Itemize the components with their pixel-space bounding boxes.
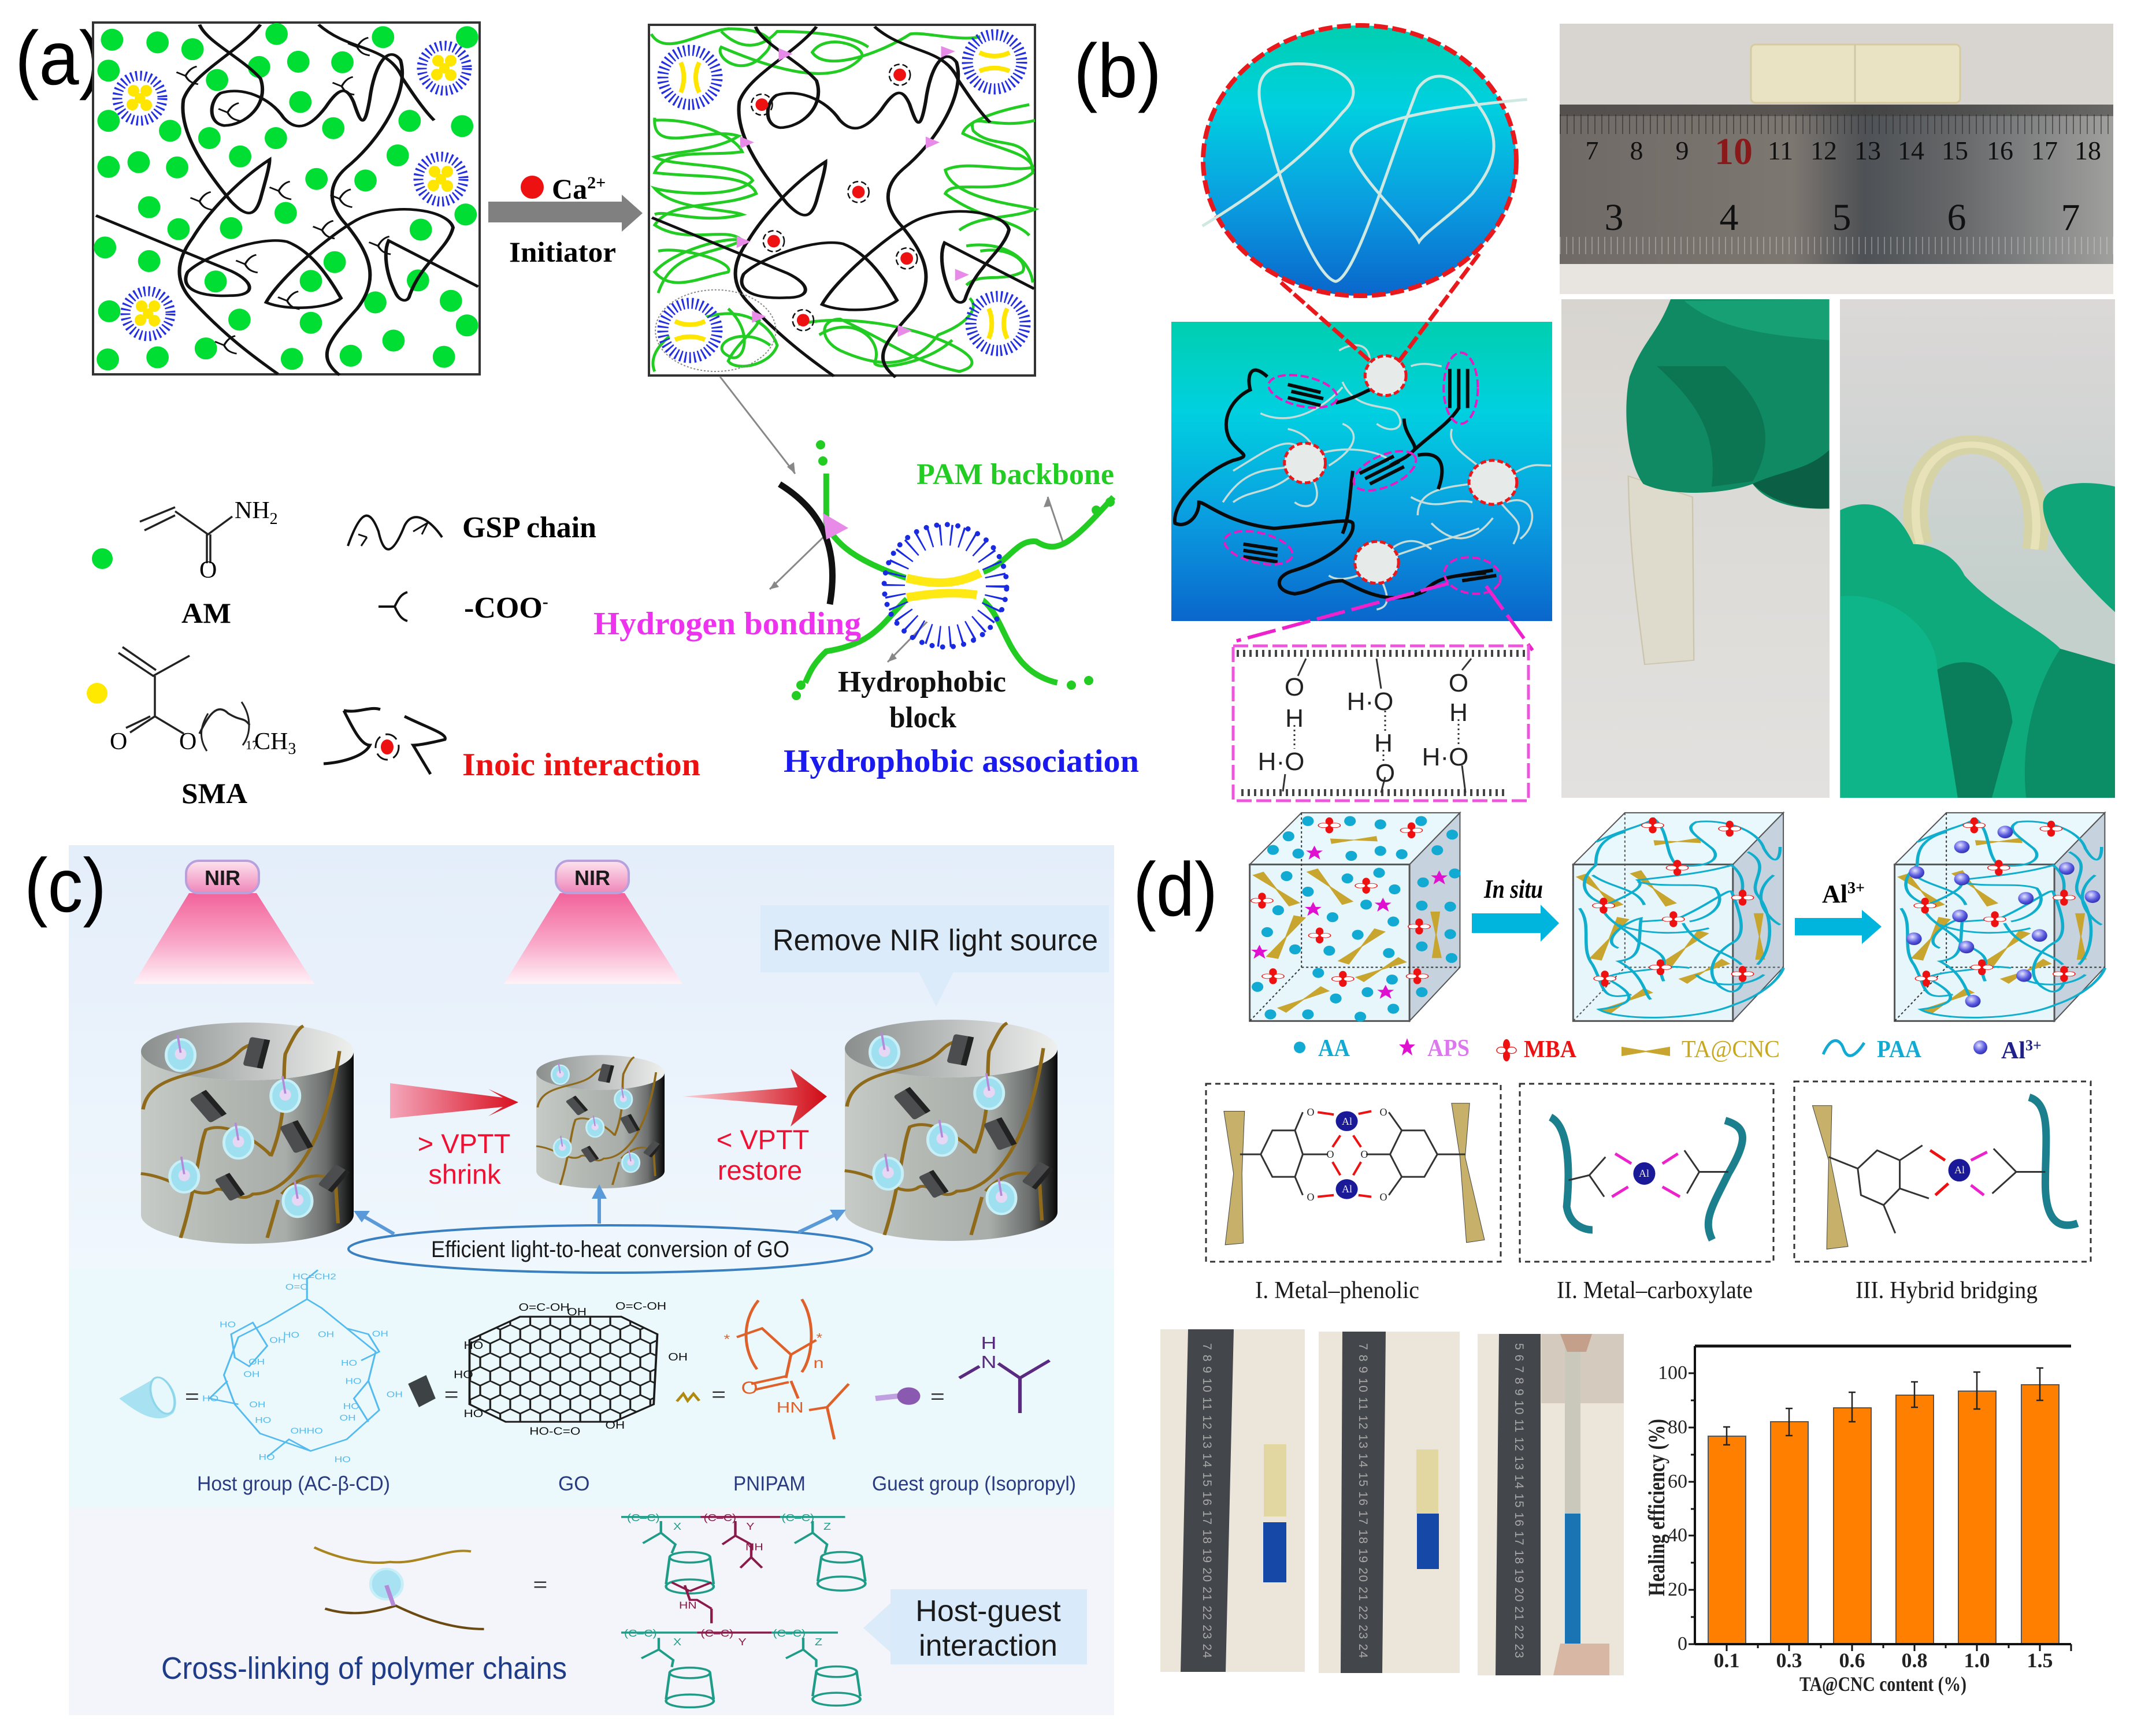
legend: AM monomer <box>92 497 278 629</box>
photo: gel on steel ruler: 16 <box>1987 136 2013 165</box>
label: Hydrophobic association: Hydrophobic association <box>784 744 1139 779</box>
host-guest copolymer structure: X <box>673 1522 681 1533</box>
legend row: Al <box>2001 1038 2025 1064</box>
legend: GSP chain and COO: - <box>543 592 548 611</box>
cup icon and host group structure: HC=CH2 <box>292 1272 336 1281</box>
binding mode III: hybrid bridging <box>1794 1081 2091 1262</box>
legend: AM monomer: NH <box>235 497 270 524</box>
cup icon and host group structure: HO <box>202 1393 218 1403</box>
right cylinder <box>845 1020 1057 1241</box>
photo: gel on steel ruler: 7 <box>1586 136 1598 165</box>
graphene oxide flake and structure: HO <box>463 1340 483 1351</box>
callout: remove NIR light source: Remove NIR light source <box>773 924 1098 957</box>
photo: gel held by gloved hand <box>1561 299 1830 798</box>
cup icon and host group structure: = <box>185 1386 199 1408</box>
arrow: in situ <box>1472 874 1559 942</box>
host-guest copolymer structure: NH <box>745 1542 763 1553</box>
photo: gel on steel ruler: 8 <box>1630 136 1643 165</box>
right box: crosslinked network <box>649 25 1035 377</box>
binding mode I: metal-phenolic: Al <box>1342 1116 1352 1127</box>
cup icon and host group structure: OH <box>387 1389 403 1399</box>
graphene oxide flake and structure: O=C-OH <box>615 1300 666 1312</box>
photo: gel on steel ruler: 12 <box>1810 136 1837 165</box>
light-to-heat ellipse with arrows <box>348 1184 872 1273</box>
legend: GSP chain and COO: GSP chain <box>462 511 596 544</box>
axes <box>1689 1346 2071 1651</box>
captions of binding modes: I. Metal–phenolic <box>1255 1277 1419 1304</box>
photo: gel on steel ruler: 5 <box>1832 196 1851 239</box>
cup icon and host group structure: OHHO <box>291 1426 323 1436</box>
zoomed hydrophobic association <box>720 377 1115 700</box>
x tick labels <box>1714 1649 2053 1672</box>
cup icon and host group structure: HO <box>255 1415 271 1425</box>
x tick labels: 0.3 <box>1776 1649 1802 1672</box>
network rectangle <box>1171 254 1552 650</box>
hydrogen bond close-up box: H·O <box>1258 748 1304 776</box>
guest group isopropyl: N <box>981 1352 997 1372</box>
photo: gel on steel ruler: 14 <box>1898 136 1924 165</box>
label: above VPTT shrink: > VPTT <box>418 1128 510 1159</box>
photo: gel on steel ruler: 7 <box>2061 196 2080 239</box>
hydrogen bond close-up box: H·O <box>1347 687 1393 716</box>
reaction arrow with Ca2+ and initiator <box>488 173 643 268</box>
label: PAM backbone: PAM backbone <box>916 458 1114 491</box>
legend: SMA monomer: CH <box>254 728 288 755</box>
background bands <box>69 845 1114 1715</box>
legend: SMA monomer: 3 <box>288 740 296 758</box>
photo: gel on steel ruler: 3 <box>1604 196 1624 239</box>
NIR lamp 2: NIR <box>574 866 610 890</box>
cup icon and host group structure: HO <box>283 1330 299 1340</box>
captions of binding modes <box>1255 1277 2038 1304</box>
photo: healed gel on ruler <box>1319 1332 1460 1673</box>
photo: cut gel on ruler: 7 8 9 10 11 12 13 14 15 16 17 18 19 20 21 22 23 24 <box>1200 1343 1214 1658</box>
arrow: in situ: In situ <box>1483 874 1543 904</box>
binding mode II: metal-carboxylate: Al <box>1639 1168 1649 1179</box>
cube 3: Al3+ crosslinked network <box>1895 813 2105 1021</box>
host-guest copolymer structure: (C–C) <box>704 1513 736 1523</box>
graphene oxide flake and structure: = <box>444 1384 459 1406</box>
cup icon and host group structure: HO <box>346 1376 362 1386</box>
photo: gel on steel ruler: 18 <box>2075 136 2101 165</box>
legend: AM monomer: O <box>199 557 217 583</box>
guest group isopropyl: = <box>930 1386 945 1408</box>
captions of binding modes: II. Metal–carboxylate <box>1557 1277 1753 1304</box>
x axis title: TA@CNC content (%) <box>1799 1672 1966 1696</box>
legend: ionic interaction <box>324 708 700 783</box>
chemistry labels: Guest group (Isopropyl) <box>872 1473 1076 1495</box>
photo: gel on steel ruler: 15 <box>1942 136 1968 165</box>
photo: healed gel on ruler: 7 8 9 10 11 12 13 14 15 16 17 18 19 20 21 22 23 24 <box>1356 1343 1370 1658</box>
binding mode II: metal-carboxylate <box>1520 1084 1773 1262</box>
captions of binding modes: III. Hybrid bridging <box>1856 1277 2038 1304</box>
hydrogen bond close-up box: H·O <box>1422 743 1468 771</box>
chemistry labels: GO <box>558 1473 589 1495</box>
cube 1: precursor <box>1250 813 1461 1022</box>
graphene oxide flake and structure: HO <box>454 1369 473 1381</box>
legend row: PAA <box>1877 1036 1922 1063</box>
x tick labels: 1.5 <box>2027 1649 2053 1672</box>
cube 2: PAA network <box>1573 813 1783 1021</box>
binding mode I: metal-phenolic: O <box>1327 1148 1334 1160</box>
y tick labels: 20 <box>1668 1579 1687 1600</box>
PNIPAM structure: * <box>816 1331 822 1345</box>
y tick labels: 40 <box>1668 1525 1687 1546</box>
guest group isopropyl <box>875 1333 1049 1413</box>
host-guest copolymer structure: (C–C) <box>627 1513 660 1523</box>
panel label (a): (a) <box>15 16 103 101</box>
label: Hydrogen bonding: Hydrogen bonding <box>593 606 861 642</box>
guest group isopropyl: H <box>981 1333 997 1353</box>
label: Hydrophobic block: block <box>889 701 956 734</box>
reaction arrow with Ca2+ and initiator: Ca <box>552 173 587 205</box>
y tick labels <box>1658 1362 1687 1655</box>
hydrogen bond close-up box: H <box>1285 704 1304 733</box>
photo: gel on steel ruler: 10 <box>1715 131 1753 173</box>
callout: host-guest interaction: Host-guest <box>915 1594 1061 1628</box>
shrink arrow <box>390 1083 518 1118</box>
panel (b): hydrogen bonded hydrogel <box>1074 24 2115 801</box>
PNIPAM structure: HN <box>777 1399 804 1416</box>
host-guest copolymer structure: X <box>673 1637 681 1648</box>
binding mode I: metal-phenolic: O <box>1360 1148 1368 1160</box>
legend row: MBA <box>1524 1036 1577 1063</box>
label: below VPTT restore: restore <box>718 1155 802 1185</box>
photo: bent gel held by gloved fingers <box>1840 299 2115 798</box>
legend row <box>1294 1035 2042 1064</box>
cup icon and host group structure: OH <box>249 1400 265 1409</box>
legend: ionic interaction: Inoic interaction <box>462 747 700 783</box>
arrow: Al3+: Al <box>1822 880 1847 908</box>
legend: SMA monomer: O <box>179 728 196 755</box>
legend: SMA monomer: 17 <box>246 738 258 752</box>
host-guest copolymer structure: Y <box>746 1522 755 1533</box>
hydrogen bond close-up box: H <box>1374 729 1393 757</box>
cup icon and host group structure: OH <box>243 1369 259 1379</box>
chemistry labels: Host group (AC-β-CD) <box>197 1473 390 1495</box>
PNIPAM structure <box>677 1299 849 1439</box>
binding mode I: metal-phenolic: Al <box>1342 1183 1352 1195</box>
host-guest copolymer structure: HN <box>679 1600 697 1611</box>
photo: gel on steel ruler: 6 <box>1947 196 1966 239</box>
reaction arrow with Ca2+ and initiator: Initiator <box>509 236 616 268</box>
arrow: Al3+: 3+ <box>1847 879 1865 897</box>
binding mode I: metal-phenolic: O <box>1380 1191 1387 1203</box>
x tick labels: 0.1 <box>1714 1649 1739 1672</box>
chemistry row <box>119 1270 1049 1464</box>
graphene oxide flake and structure: O=C-OH <box>519 1302 570 1314</box>
cup icon and host group structure: HO <box>335 1455 351 1464</box>
host-guest copolymer structure: (C–C) <box>624 1629 657 1640</box>
panel (d): Al3+ crosslinked hydrogel <box>1133 813 2105 1696</box>
y tick labels: 100 <box>1658 1362 1687 1384</box>
cup icon and host group structure: HO <box>343 1402 359 1411</box>
panel label (c): (c) <box>24 843 106 928</box>
cup icon and host group structure: HO <box>259 1452 275 1462</box>
legend: AM monomer: AM <box>181 597 231 629</box>
chemistry labels <box>197 1473 1076 1495</box>
host-guest copolymer structure: Z <box>815 1637 822 1648</box>
y tick labels: 80 <box>1668 1417 1687 1438</box>
host-guest copolymer structure <box>621 1513 866 1707</box>
host-guest copolymer structure: Z <box>823 1522 831 1533</box>
cup icon and host group structure: OH <box>248 1357 265 1367</box>
y tick labels: 60 <box>1668 1471 1687 1492</box>
y tick labels: 0 <box>1678 1633 1687 1655</box>
label: below VPTT restore: < VPTT <box>717 1124 809 1155</box>
photo: gel on steel ruler: 4 <box>1720 196 1738 239</box>
photo: cut gel on ruler <box>1160 1329 1305 1672</box>
callout: host-guest interaction <box>863 1589 1087 1664</box>
cup icon and host group structure: OH <box>318 1329 334 1339</box>
bars <box>1708 1385 2059 1644</box>
shrunken middle cylinder <box>536 1055 665 1188</box>
cup icon and host group structure: OH <box>269 1335 285 1345</box>
cup icon and host group structure: HO <box>220 1319 236 1329</box>
legend: SMA monomer: SMA <box>181 777 247 809</box>
legend: SMA monomer: O <box>110 728 127 755</box>
graphene oxide flake and structure: HO <box>463 1408 483 1419</box>
reaction arrow with Ca2+ and initiator: 2+ <box>587 173 606 192</box>
x tick labels: 0.8 <box>1901 1649 1928 1672</box>
label: cross-linking: Cross-linking of polymer chains <box>161 1651 567 1686</box>
polymer chain crosslink illustration: = <box>533 1574 547 1596</box>
hydrogen bond close-up box: O <box>1449 669 1468 697</box>
restore arrow <box>682 1069 827 1127</box>
photo: gel on steel ruler <box>1560 24 2113 294</box>
photo: gel on steel ruler: 11 <box>1768 136 1793 165</box>
binding mode I: metal-phenolic <box>1206 1084 1501 1262</box>
cup icon and host group structure: OH <box>372 1329 388 1339</box>
panel label (d): (d) <box>1133 847 1218 932</box>
left box: monomers and GSP chains <box>93 23 480 375</box>
legend row: AA <box>1318 1035 1350 1062</box>
host-guest copolymer structure: (C–C) <box>782 1513 814 1523</box>
PNIPAM structure: n <box>814 1355 824 1371</box>
photo: stretched gel on ruler <box>1478 1334 1624 1675</box>
x tick labels: 1.0 <box>1964 1649 1990 1672</box>
hydrogen bond close-up box: H <box>1449 698 1468 727</box>
legend row: 3+ <box>2025 1037 2042 1054</box>
legend: GSP chain and COO: -COO <box>464 592 543 624</box>
hydrogen bond close-up box: O <box>1375 759 1395 787</box>
NIR lamp 1 <box>133 861 314 984</box>
host-guest copolymer structure: (C–C) <box>700 1629 733 1640</box>
panel (a): polymerisation schematic <box>15 16 1139 809</box>
bar chart: healing efficiency <box>1643 1346 2071 1696</box>
cup icon and host group structure: OH <box>340 1413 356 1423</box>
light-to-heat ellipse with arrows: Efficient light-to-heat conversion of GO <box>431 1237 789 1262</box>
photo: stretched gel on ruler: 5 6 7 8 9 10 11 12 13 14 15 16 17 18 19 20 21 22 23 <box>1512 1343 1526 1658</box>
y axis title: Healing efficiency (%) <box>1643 1419 1669 1596</box>
host-guest copolymer structure: (C–C) <box>773 1629 806 1640</box>
error bars <box>1723 1368 2043 1445</box>
panel label (b): (b) <box>1074 28 1162 113</box>
graphene oxide flake and structure: HO-C=O <box>529 1425 580 1437</box>
panel (c): NIR responsive hydrogel <box>24 843 1114 1715</box>
hydrogen bond close-up box: O <box>1285 673 1304 701</box>
hydrogen bond close-up box <box>1233 646 1528 801</box>
label: Hydrophobic block: Hydrophobic <box>838 666 1006 698</box>
graphene oxide flake and structure: OH <box>567 1306 587 1318</box>
legend: AM monomer: 2 <box>270 510 278 528</box>
magnified chain circle <box>1203 25 1527 296</box>
photo: gel on steel ruler: 9 <box>1676 136 1689 165</box>
NIR lamp 2 <box>504 861 682 984</box>
photo: gel on steel ruler: 13 <box>1854 136 1881 165</box>
photo: gel on steel ruler: 17 <box>2031 136 2058 165</box>
left cylinder <box>141 1023 354 1244</box>
x tick labels: 0.6 <box>1839 1649 1865 1672</box>
callout: host-guest interaction: interaction <box>919 1629 1057 1663</box>
binding mode I: metal-phenolic: O <box>1307 1191 1314 1203</box>
binding mode I: metal-phenolic: O <box>1307 1106 1314 1118</box>
arrow: Al3+ <box>1795 879 1882 944</box>
cup icon and host group structure: HO <box>341 1358 357 1368</box>
PNIPAM structure: = <box>711 1384 726 1406</box>
cup icon and host group structure <box>119 1270 403 1464</box>
legend row: TA@CNC <box>1682 1036 1780 1063</box>
PNIPAM structure: O <box>741 1378 758 1398</box>
NIR lamp 1: NIR <box>205 866 240 890</box>
PNIPAM structure: * <box>724 1332 730 1347</box>
polymer chain crosslink illustration <box>314 1547 547 1629</box>
legend: SMA monomer <box>87 647 296 809</box>
graphene oxide flake and structure <box>408 1300 688 1437</box>
graphene oxide flake and structure: OH <box>668 1351 688 1363</box>
cup icon and host group structure: O=C <box>285 1282 308 1292</box>
chemistry labels: PNIPAM <box>733 1473 806 1495</box>
legend row: APS <box>1427 1035 1470 1062</box>
host-guest copolymer structure: Y <box>739 1637 747 1648</box>
label: above VPTT shrink: shrink <box>428 1159 501 1189</box>
binding mode I: metal-phenolic: O <box>1380 1106 1387 1118</box>
callout: remove NIR light source <box>760 905 1109 1006</box>
binding mode III: hybrid bridging: Al <box>1954 1164 1965 1176</box>
graphene oxide flake and structure: OH <box>606 1419 625 1432</box>
legend: GSP chain and COO <box>348 511 596 624</box>
